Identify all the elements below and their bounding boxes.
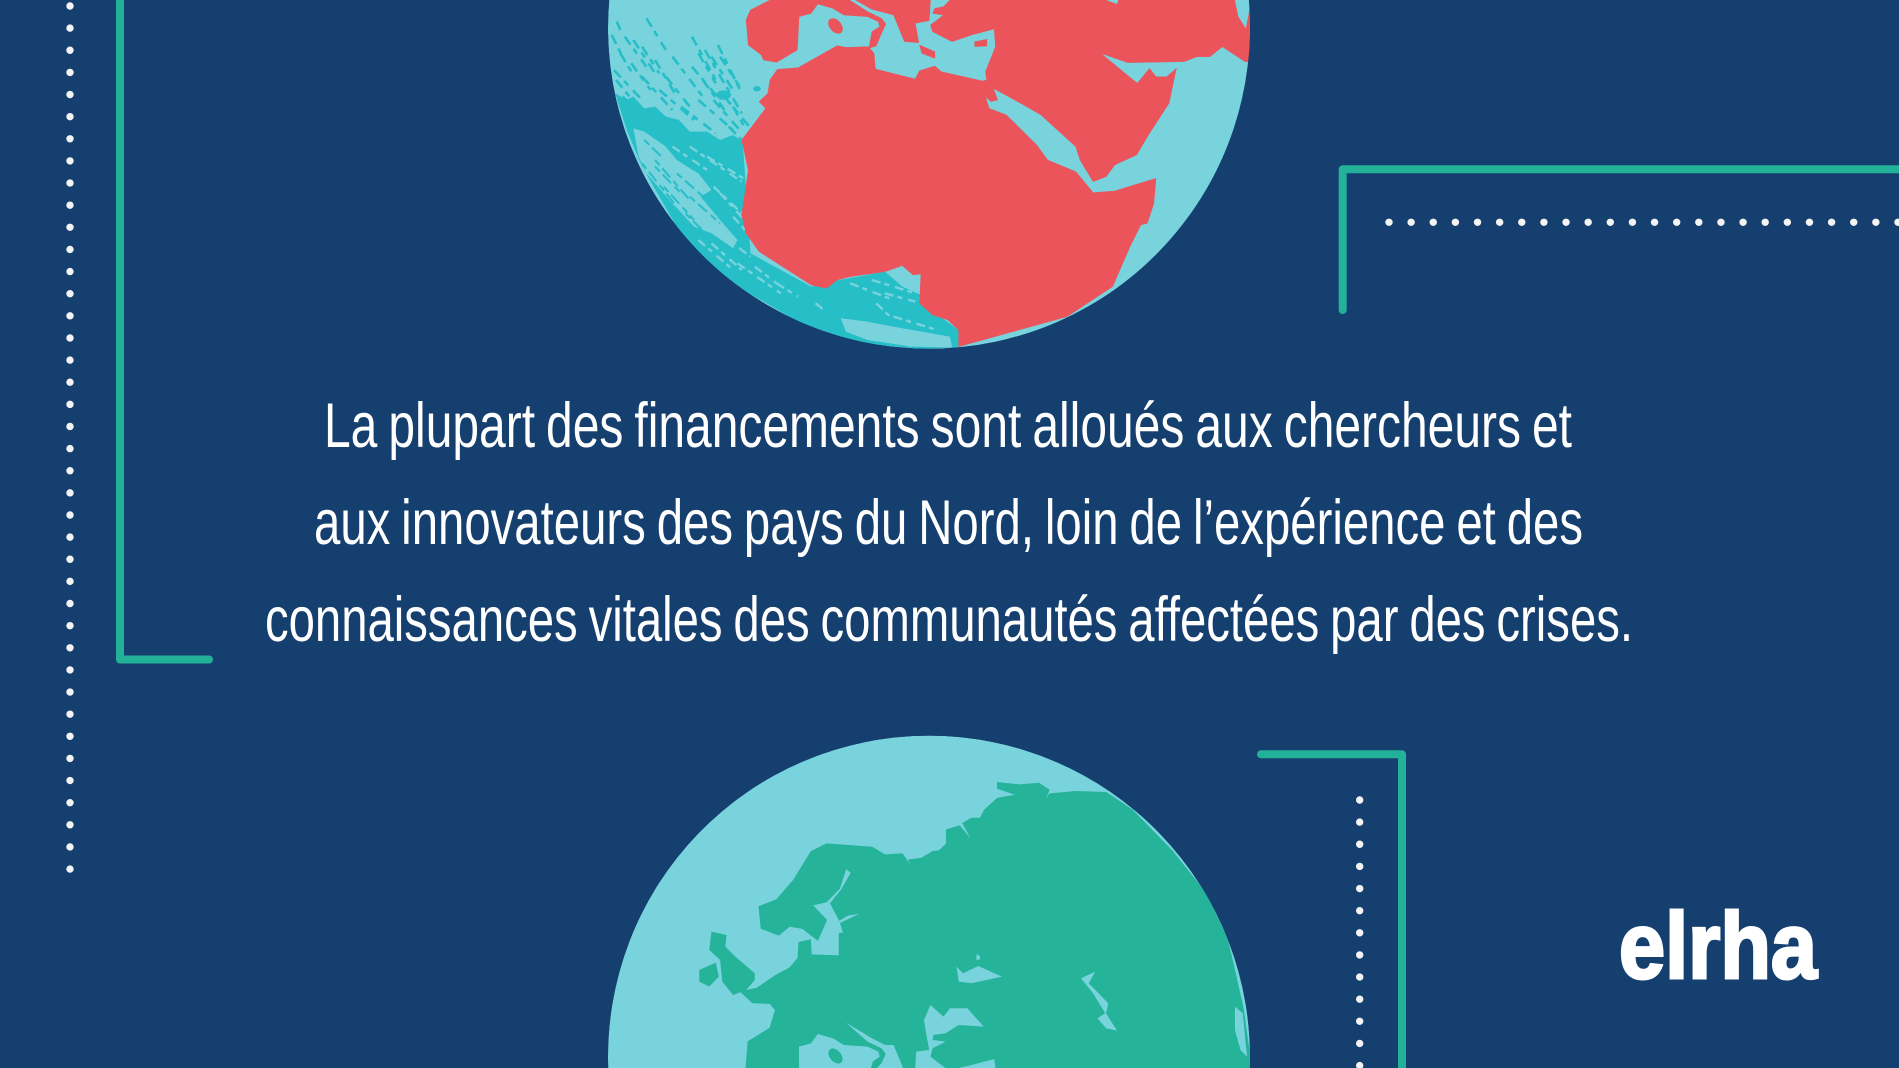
- islands: Britain and Ireland: [699, 932, 755, 995]
- land: green continents: [741, 783, 1251, 1068]
- bottom right green bracket: [1257, 750, 1402, 1068]
- globe: top, Africa and Middle East in red: [608, 0, 1258, 349]
- Sardinia: [828, 1048, 842, 1064]
- bottom right dotted column: [1356, 800, 1363, 1066]
- left dotted column: [66, 6, 74, 870]
- body text: [265, 391, 1633, 655]
- globe: bottom, Europe and Asia in green: [608, 736, 1251, 1068]
- top right dotted row: [1389, 219, 1899, 226]
- ocean shading: [612, 18, 959, 349]
- sea gaps: [1106, 0, 1251, 28]
- seas and lakes: [799, 954, 1247, 1068]
- logo: elrha: elrha: [1619, 893, 1818, 998]
- left green bracket: [120, 0, 213, 664]
- land: red continents: [742, 0, 1258, 347]
- top right green bracket: [1339, 169, 1899, 314]
